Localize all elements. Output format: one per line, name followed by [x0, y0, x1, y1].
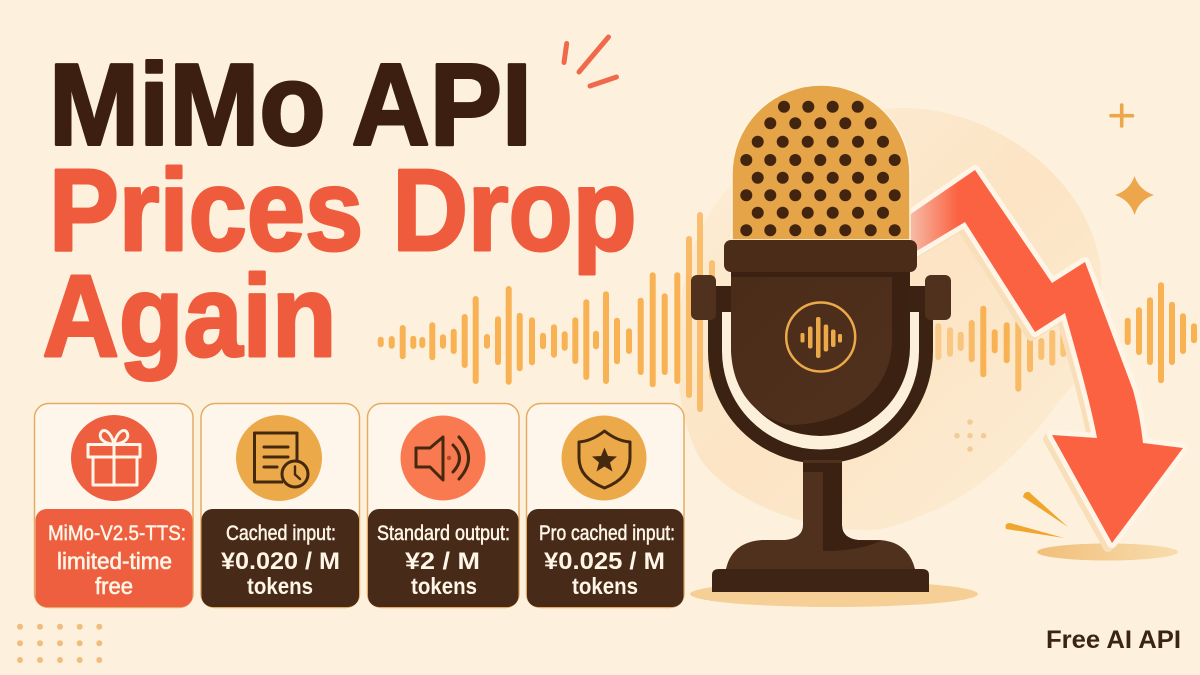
- body highlight: [731, 277, 892, 425]
- decorative dot grid: [17, 624, 102, 663]
- card 3: standard output: [368, 404, 519, 608]
- cradle interior: [715, 312, 926, 457]
- card frame: [201, 404, 360, 608]
- stem and base dome: [726, 460, 915, 569]
- accent sparks near title: [564, 37, 616, 86]
- background circle behind microphone: [677, 108, 1101, 530]
- label text: Standard output:: [377, 522, 510, 545]
- label panel: [202, 509, 359, 607]
- label text: Cached input:: [226, 522, 336, 545]
- arrow shadow: [901, 174, 1179, 547]
- connector bars: [712, 286, 930, 312]
- impact wedges: [1006, 492, 1068, 538]
- card 4: pro cached input: [526, 404, 684, 608]
- label text: ¥2 / M: [405, 548, 480, 575]
- right knob: [925, 275, 951, 320]
- title line 2: Prices Drop: [49, 145, 636, 275]
- label text: ¥0.025 / M: [544, 548, 665, 575]
- card frame: [526, 404, 684, 608]
- label text: [221, 522, 340, 599]
- icon: gift: [71, 415, 157, 501]
- title: [42, 40, 636, 381]
- label text: free: [95, 573, 133, 599]
- four point star: [1115, 176, 1154, 215]
- label text: Pro cached input:: [539, 522, 675, 545]
- arrow ground shadow: [1037, 544, 1178, 560]
- sound waveform: [378, 212, 1197, 412]
- label panel: [36, 509, 192, 607]
- label text: tokens: [411, 573, 477, 599]
- card 2: cached input: [201, 404, 360, 608]
- label text: tokens: [572, 573, 638, 599]
- label text: [48, 522, 186, 599]
- label text: limited-time: [57, 548, 172, 574]
- brand label: Free AI API: [1046, 626, 1181, 654]
- collar: [724, 240, 917, 272]
- title line 3: Again: [42, 251, 336, 381]
- waveform logo: [786, 302, 855, 372]
- label text: tokens: [247, 573, 313, 599]
- title line 1: MiMo API: [49, 40, 532, 170]
- cradle ring: [715, 312, 926, 457]
- label panel: [368, 509, 518, 607]
- card 1: MiMo-V2.5-TTS free: [34, 404, 193, 608]
- microphone body: [731, 270, 910, 436]
- icon: shield with star: [562, 416, 646, 500]
- stem shadow: [803, 463, 880, 551]
- icon: document with clock: [236, 415, 322, 501]
- label text: MiMo-V2.5-TTS:: [48, 522, 186, 545]
- falling price arrow: [901, 170, 1183, 547]
- label text: ¥0.020 / M: [221, 548, 340, 575]
- card frame: [34, 404, 193, 608]
- small dot cross: [954, 419, 986, 452]
- base plate: [712, 569, 929, 592]
- label text: [539, 522, 675, 599]
- left knob: [691, 275, 716, 320]
- label text: [377, 522, 510, 599]
- icon: speaker: [400, 416, 486, 500]
- label panel: [527, 509, 684, 607]
- microphone ground shadow: [690, 581, 978, 607]
- microphone: [691, 85, 951, 592]
- card frame: [368, 404, 519, 608]
- grille dots: [740, 101, 901, 236]
- arrow shape: [905, 170, 1183, 543]
- microphone head: [732, 85, 910, 240]
- plus sparkle: [1111, 105, 1132, 126]
